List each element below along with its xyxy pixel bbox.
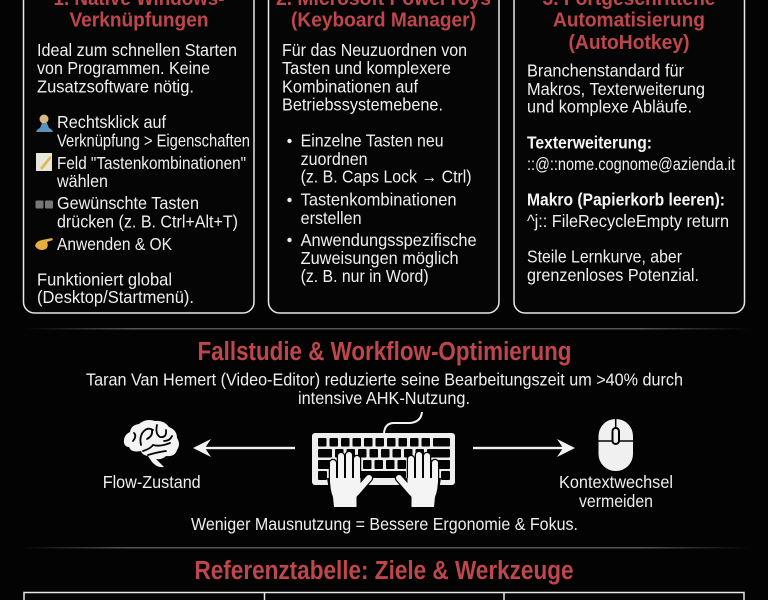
heading: card 3: Automatisierung <box>553 9 705 32</box>
text block: card 3 note <box>527 247 699 285</box>
bullet: create shortcuts: erstellen <box>301 208 362 228</box>
heading: card 1 <box>54 0 224 32</box>
arrow: to brain <box>193 439 295 457</box>
code example: macro <box>527 190 729 231</box>
text block: card 1 intro: Zusatzsoftware nötig. <box>37 77 194 97</box>
icon: person <box>36 114 53 132</box>
list step: right click: Rechtsklick auf <box>57 112 166 132</box>
icon: right hand <box>399 455 441 510</box>
bullet: remap keys: zuordnen <box>301 149 368 169</box>
list step: shortcut field <box>56 153 246 191</box>
panel: AutoHotkey <box>514 0 744 313</box>
text block: card 1 note: Funktioniert global <box>37 270 172 290</box>
bullet: app specific <box>287 230 477 286</box>
heading: card 3 <box>542 0 716 54</box>
list step: right click <box>57 112 250 151</box>
text block: card 2 intro: Kombinationen auf <box>282 77 418 97</box>
text block: ergonomics takeaway: Weniger Mausnutzung = Bessere Ergonomie & Fokus. <box>191 514 578 534</box>
panel: native Windows shortcuts <box>24 0 254 313</box>
icon: memo <box>36 153 52 171</box>
panel: Microsoft PowerToys <box>268 0 499 313</box>
heading: card 2 <box>276 0 491 32</box>
arrow: to mouse <box>473 439 575 457</box>
text block: card 3 intro <box>527 61 705 117</box>
text block: card 1 intro <box>37 40 237 97</box>
icon: pointing hand <box>35 238 53 250</box>
text block: card 1 note <box>37 270 194 307</box>
icon: left hand <box>327 455 369 510</box>
text block: card 3 intro: Branchenstandard für <box>527 61 684 81</box>
heading: card 3: (AutoHotkey) <box>568 31 690 54</box>
text block: case study description: Taran Van Hemert (Video-Editor) reduzierte seine Bearbeitungszeit um >40% durch <box>86 370 683 390</box>
list step: press keys <box>57 193 238 232</box>
label: flow state: Flow-Zustand <box>103 472 201 492</box>
label: avoid context switch: vermeiden <box>579 491 653 511</box>
heading: case study: Fallstudie & Workflow-Optimierung <box>198 338 572 366</box>
list step: shortcut field: Feld "Tastenkombinationen" <box>57 153 246 173</box>
text block: card 3 note: Steile Lernkurve, aber <box>527 247 682 267</box>
list step: press keys: Gewünschte Tasten <box>57 193 199 213</box>
bullet: remap keys <box>287 131 472 187</box>
heading: card 1: Verknüpfungen <box>70 9 208 32</box>
text block: card 2 intro: Betriebssystemebene. <box>282 95 443 115</box>
list step: shortcut field: wählen <box>56 171 108 191</box>
icon: keys <box>36 200 53 208</box>
text block: card 3 intro: und komplexe Abläufe. <box>527 97 692 117</box>
code example: macro: Makro (Papierkorb leeren): <box>527 190 725 210</box>
text block: card 3 note: grenzenloses Potenzial. <box>527 265 699 285</box>
bullet: remap keys: (z. B. Caps Lock → Ctrl) <box>301 167 472 187</box>
bullet: remap keys: Einzelne Tasten neu <box>301 131 444 151</box>
icon: brain <box>124 420 179 467</box>
label: avoid context switch: Kontextwechsel <box>559 472 673 492</box>
text block: case study description <box>86 370 683 408</box>
code example: macro: ^j:: FileRecycleEmpty return <box>527 211 729 231</box>
code example: text expansion: Texterweiterung: <box>527 132 652 152</box>
text block: card 2 intro <box>282 40 467 115</box>
bullet: app specific: Anwendungsspezifische <box>301 230 477 250</box>
bullet: create shortcuts <box>287 190 457 228</box>
list step: press keys: drücken (z. B. Ctrl+Alt+T) <box>57 212 238 232</box>
text block: card 1 note: (Desktop/Startmenü). <box>37 287 194 307</box>
heading: card 2: (Keyboard Manager) <box>291 9 476 32</box>
text block: card 3 intro: Makros, Texterweiterung <box>527 79 705 99</box>
icon: keyboard with hands <box>312 412 455 510</box>
bullet: app specific: (z. B. nur in Word) <box>301 266 429 286</box>
list step: right click: Verknüpfung > Eigenschaften <box>57 131 250 151</box>
text block: case study description: intensive AHK-Nutzung. <box>298 388 470 408</box>
text block: card 1 intro: von Programmen. Keine <box>37 58 210 78</box>
heading: reference table: Referenztabelle: Ziele & Werkzeuge <box>194 557 574 585</box>
code example: text expansion <box>527 132 735 174</box>
table: reference table top <box>24 592 744 600</box>
label: avoid context switch <box>559 472 673 511</box>
list step: apply: Anwenden & OK <box>57 234 172 254</box>
bullet: create shortcuts: Tastenkombinationen <box>301 190 457 210</box>
text block: card 2 intro: Tasten und komplexere <box>282 58 451 78</box>
bullet: app specific: Zuweisungen möglich <box>301 248 459 268</box>
text block: card 1 intro: Ideal zum schnellen Starten <box>37 40 237 60</box>
icon: mouse <box>598 419 633 471</box>
text block: card 2 intro: Für das Neuzuordnen von <box>282 40 467 60</box>
